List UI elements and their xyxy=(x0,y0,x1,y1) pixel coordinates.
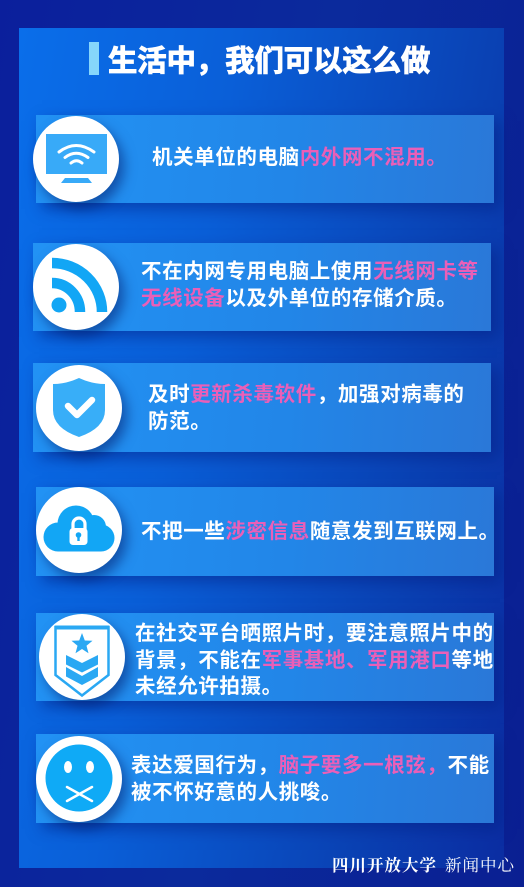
panel: item 4 confidential information xyxy=(36,487,494,576)
text: item 3: 防范。 xyxy=(148,410,211,433)
text: item 5: 背景，不能在军事基地、军用港口等地 xyxy=(135,649,494,672)
text: item 2: 无线设备以及外单位的存储介质。 xyxy=(141,287,458,310)
text: item 6 xyxy=(131,754,490,804)
panel: item 1 intranet and internet xyxy=(36,115,494,203)
text: item 3 xyxy=(148,383,465,433)
icon: shield with check xyxy=(36,365,122,451)
text: item 5: 未经允许拍摄。 xyxy=(135,675,283,698)
icon: cloud with lock xyxy=(36,487,122,573)
text: item 2: 不在内网专用电脑上使用无线网卡等 xyxy=(141,260,479,283)
text: item 5 xyxy=(135,622,494,698)
panel: item 5 military locations xyxy=(36,613,494,701)
icon: rss signal xyxy=(33,244,119,330)
title: 生活中，我们可以这么做 xyxy=(108,45,430,78)
panel: item 6 patriotic behaviour xyxy=(36,734,494,823)
panel: item 2 wireless devices xyxy=(33,243,491,331)
text: item 2 xyxy=(141,260,479,310)
text: item 6: 表达爱国行为，脑子要多一根弦，不能 xyxy=(131,754,490,777)
panel: item 3 antivirus xyxy=(33,363,491,452)
text: item 5: 在社交平台晒照片时，要注意照片中的 xyxy=(135,622,494,645)
text: item 3: 及时更新杀毒软件，加强对病毒的 xyxy=(148,383,465,406)
text: item 1: 机关单位的电脑内外网不混用。 xyxy=(152,146,447,169)
text: item 6: 被不怀好意的人挑唆。 xyxy=(131,781,342,804)
title accent bar xyxy=(89,42,99,75)
icon: military rank badge xyxy=(39,614,125,700)
text: item 4: 不把一些涉密信息随意发到互联网上。 xyxy=(141,520,500,543)
footer credit: 四川开放大学 新闻中心 xyxy=(332,856,515,875)
icon: silent face xyxy=(36,736,122,822)
icon: monitor with wifi xyxy=(33,116,119,202)
